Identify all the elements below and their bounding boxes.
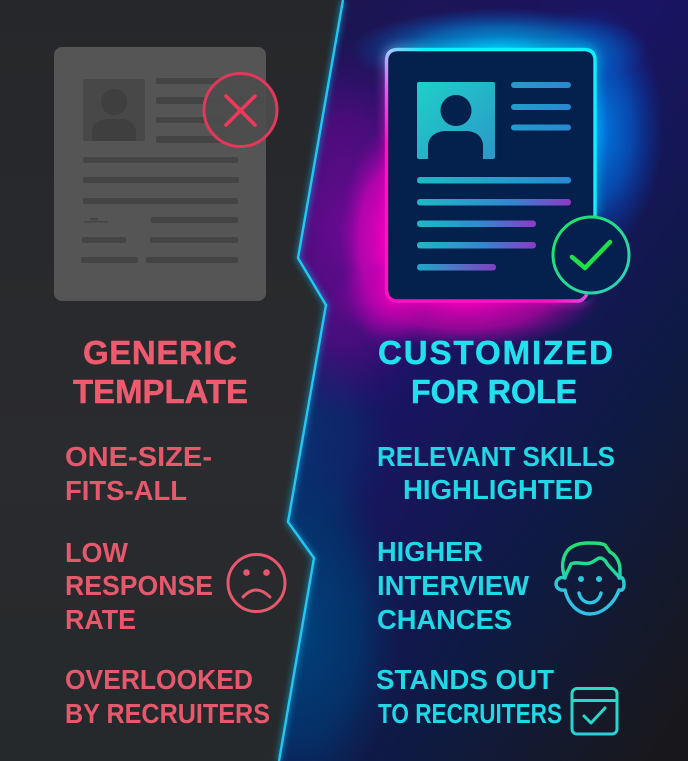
highlighted text lines	[417, 82, 571, 270]
text: one-size-fits-all	[65, 441, 212, 506]
icon: red X badge	[204, 74, 277, 146]
heading: generic template	[73, 334, 248, 410]
icon: smiling face	[556, 543, 624, 614]
heading: customized for role	[378, 334, 613, 410]
text: relevant skills highlighted: RELEVANT SKILLS	[377, 441, 615, 472]
heading: customized for role: FOR ROLE	[411, 373, 577, 410]
text: stands out to recruiters: TO RECRUITERS	[378, 698, 562, 729]
panel: customized resume document	[386, 49, 595, 301]
text: relevant skills highlighted: HIGHLIGHTED	[403, 474, 593, 505]
photo placeholder	[83, 79, 145, 141]
photo with person	[417, 82, 495, 159]
text: low response rate: RATE	[65, 604, 136, 635]
text: higher interview chances	[377, 536, 530, 635]
text: low response rate	[65, 537, 213, 635]
text: higher interview chances: HIGHER	[377, 536, 483, 567]
text: higher interview chances: CHANCES	[377, 604, 512, 635]
text: stands out to recruiters: STANDS OUT	[376, 664, 554, 695]
icon: sad face	[228, 554, 285, 612]
text: one-size-fits-all: FITS-ALL	[65, 475, 187, 506]
text: relevant skills highlighted	[377, 441, 615, 505]
text: low response rate: LOW	[65, 537, 129, 568]
text: overlooked by recruiters	[65, 664, 270, 729]
text: stands out to recruiters	[376, 664, 562, 729]
text: overlooked by recruiters: OVERLOOKED	[65, 664, 253, 695]
panel: generic resume document	[54, 47, 266, 301]
right panel background with neon glow	[279, 0, 688, 761]
placeholder text lines	[81, 78, 264, 263]
heading: customized for role: CUSTOMIZED	[378, 334, 613, 371]
heading: generic template: TEMPLATE	[73, 373, 248, 410]
divider: neon cyan zigzag line	[279, 0, 343, 761]
text: overlooked by recruiters: BY RECRUITERS	[65, 698, 270, 729]
icon: calendar check	[572, 688, 617, 734]
heading: generic template: GENERIC	[83, 334, 237, 371]
text: low response rate: RESPONSE	[65, 570, 213, 601]
icon: green check badge	[553, 217, 629, 293]
text: higher interview chances: INTERVIEW	[377, 570, 530, 601]
text: one-size-fits-all: ONE-SIZE-	[65, 441, 212, 472]
